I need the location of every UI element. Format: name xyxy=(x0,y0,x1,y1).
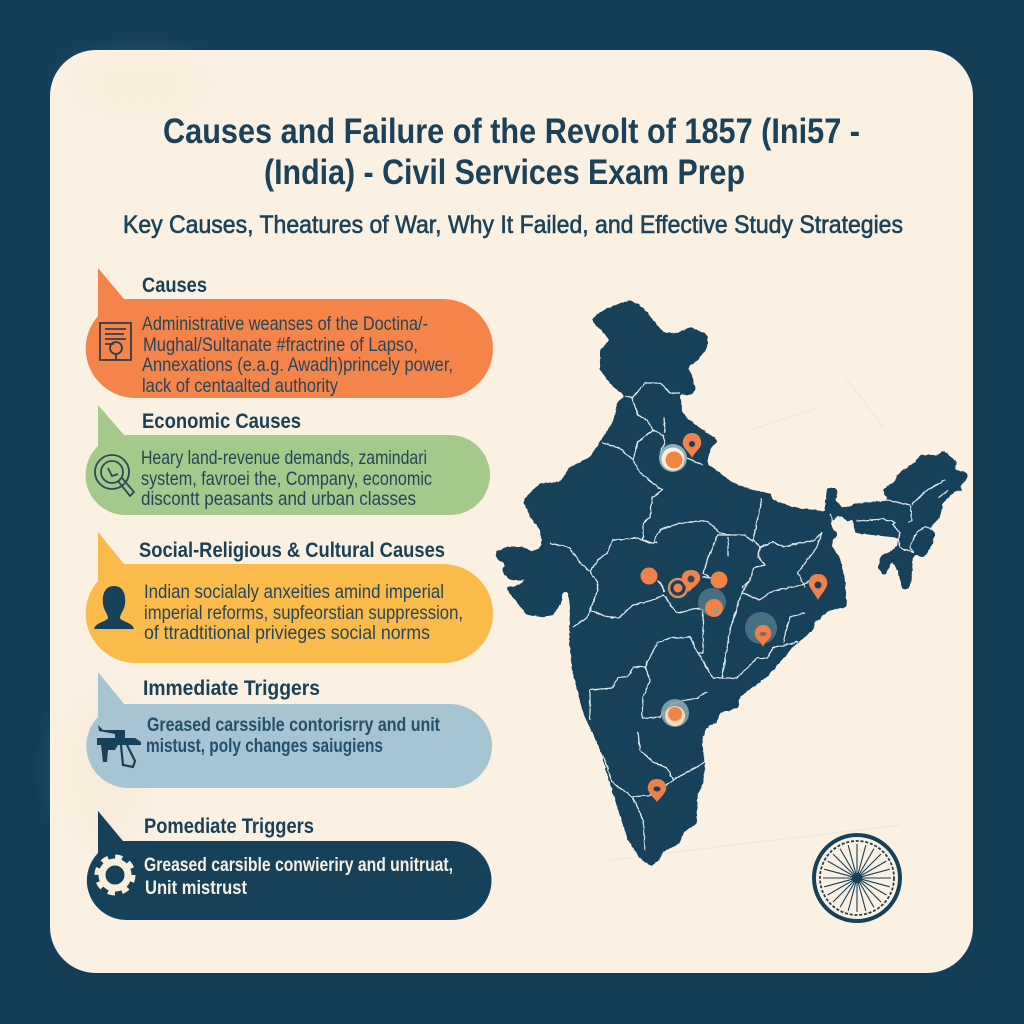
causes text: lack of centaalted authority xyxy=(142,375,338,397)
title: (India) - Civil Services Exam Prep xyxy=(264,153,745,192)
social text: Indian socialaly anxeities amind imperial xyxy=(144,581,444,603)
marker: halo pin orissa xyxy=(745,612,777,647)
economic bubble xyxy=(86,405,490,515)
marker: halo delhi xyxy=(659,444,687,472)
icon: gear xyxy=(97,857,133,893)
immediate text: Greased carssible contorisrry and unit xyxy=(147,714,440,736)
panel: economic causes xyxy=(86,405,490,515)
economic text: Heary land-revenue demands, zamindari xyxy=(141,447,427,469)
economic text: system, favroei the, Company, economic xyxy=(141,468,432,490)
marker: halo hyderabad xyxy=(661,699,689,727)
marker: target xyxy=(669,579,687,597)
causes heading: Causes xyxy=(142,274,207,297)
pomediate text xyxy=(144,854,453,899)
title xyxy=(163,112,860,192)
title: Causes and Failure of the Revolt of 1857 (Ini57 - xyxy=(163,112,860,151)
panel: causes xyxy=(86,268,493,398)
immediate heading: Immediate Triggers xyxy=(143,677,320,700)
immediate text xyxy=(146,714,440,757)
icon: person xyxy=(94,586,134,629)
icon: rifle xyxy=(97,725,141,767)
causes text: Annexations (e.a.g. Awadh)princely power, xyxy=(142,354,453,376)
pomediate text: Unit mistrust xyxy=(145,877,247,899)
economic text: discontt peasants and urban classes xyxy=(141,488,416,510)
marker: dot west central xyxy=(640,568,658,584)
panel: pomediate triggers xyxy=(87,811,492,920)
marker: pin central xyxy=(682,570,700,592)
panel: social-religious and cultural causes xyxy=(86,532,493,663)
india map xyxy=(495,300,968,866)
immediate text: mistust, poly changes saiugiens xyxy=(146,735,383,757)
map landmass xyxy=(495,300,968,866)
icon: document xyxy=(100,323,131,360)
marker: dot east central xyxy=(710,572,728,588)
social text xyxy=(144,581,463,644)
icon: ashoka chakra xyxy=(814,835,900,921)
subtitle: Key Causes, Theatures of War, Why It Failed, and Effective Study Strategies xyxy=(123,211,903,239)
economic text xyxy=(141,447,432,510)
state borders xyxy=(550,383,948,850)
causes text: Administrative weanses of the Doctina/- xyxy=(142,313,428,335)
map markers xyxy=(640,433,827,802)
economic heading: Economic Causes xyxy=(142,410,301,433)
marker: pin south xyxy=(648,779,666,802)
marker: pin east xyxy=(809,574,827,600)
pomediate text: Greased carsible conwieriry and unitruat, xyxy=(144,854,453,876)
causes text xyxy=(142,313,453,397)
social text: imperial reforms, supfeorstian suppression, xyxy=(144,602,463,624)
social bubble xyxy=(86,532,493,663)
immediate bubble xyxy=(86,672,492,788)
causes text: Mughal/Sultanate #fractrine of Lapso, xyxy=(143,334,418,356)
causes bubble xyxy=(86,268,493,398)
social text: of ttradtitional privieges social norms xyxy=(144,622,430,644)
marker: halo jhansi xyxy=(698,588,726,617)
pomediate bubble xyxy=(87,811,492,920)
pomediate heading: Pomediate Triggers xyxy=(144,815,314,838)
social heading: Social-Religious & Cultural Causes xyxy=(139,539,445,562)
icon: magnifier xyxy=(95,455,134,496)
marker: pin north xyxy=(683,433,701,458)
panel: immediate triggers xyxy=(86,672,492,788)
